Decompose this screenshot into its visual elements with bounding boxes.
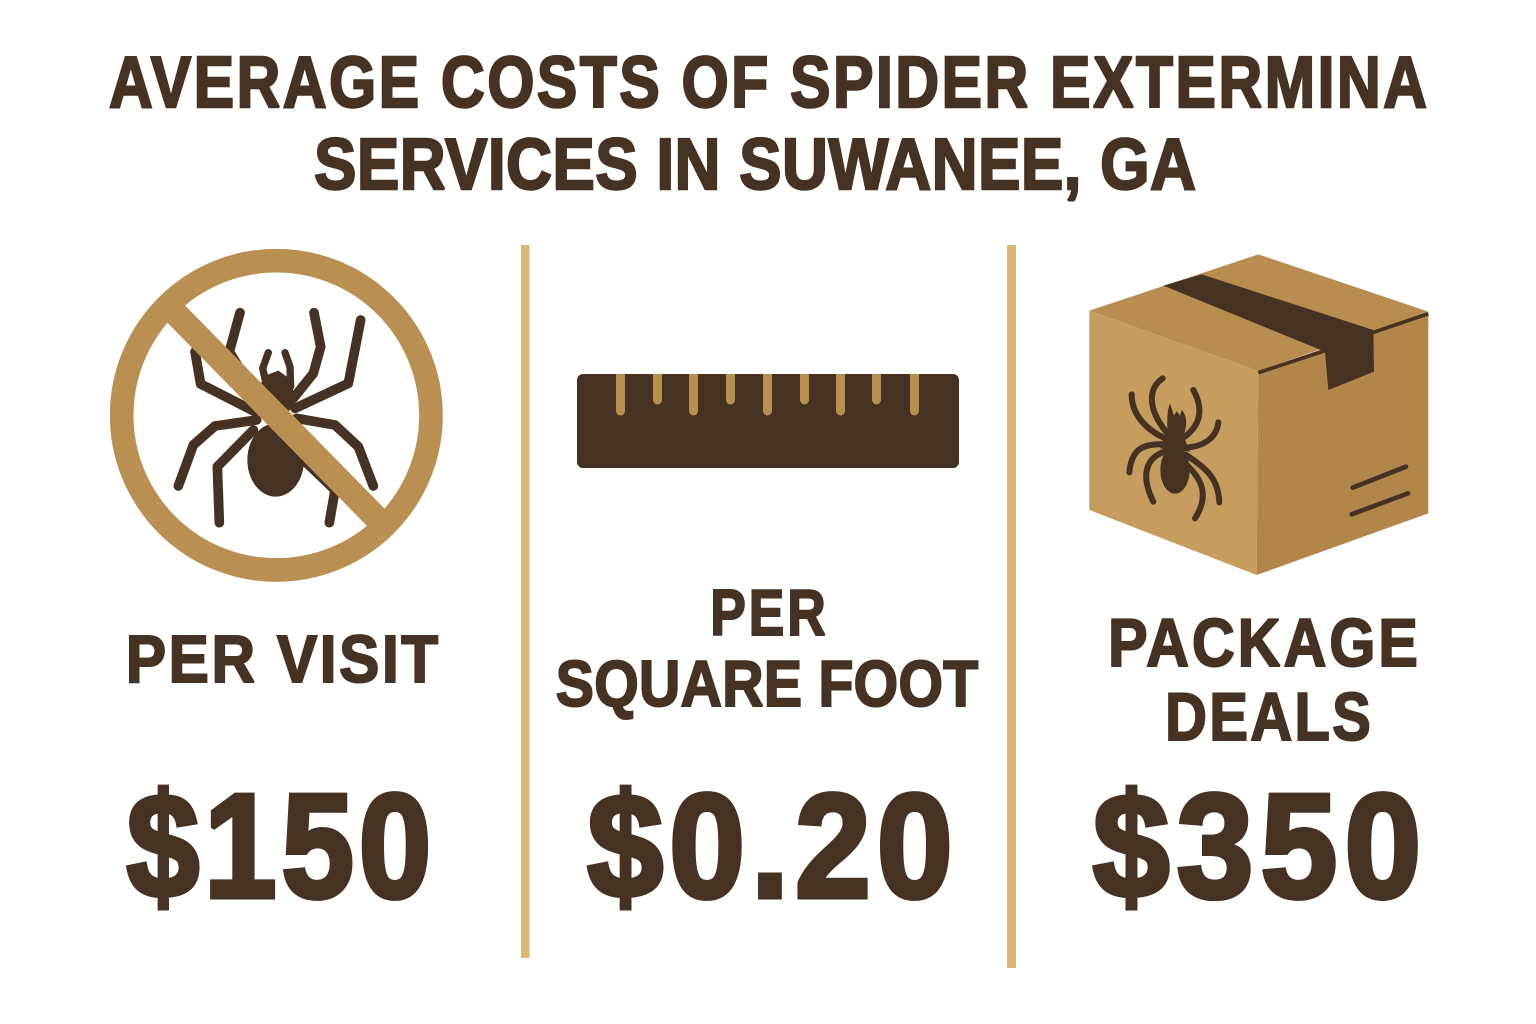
label: package deals: PACKAGE xyxy=(1108,604,1418,681)
price: $0.20: $0.20 xyxy=(587,764,953,929)
icon: no spiders xyxy=(122,261,431,570)
label: package deals xyxy=(1108,604,1418,755)
divider right xyxy=(1007,245,1016,968)
title: SERVICES IN SUWANEE, GA xyxy=(314,125,1196,205)
label: per square foot: SQUARE FOOT xyxy=(556,648,978,720)
icon: spider package box xyxy=(1089,254,1428,575)
label: per visit: PER VISIT xyxy=(126,621,438,697)
label: per square foot: PER xyxy=(710,576,826,649)
label: package deals: DEALS xyxy=(1165,680,1371,755)
label: per square foot xyxy=(556,576,978,720)
icon: ruler xyxy=(577,374,959,468)
divider left xyxy=(521,245,530,958)
price: $350: $350 xyxy=(1093,764,1421,929)
title xyxy=(109,43,1427,205)
title: AVERAGE COSTS OF SPIDER EXTERMINA xyxy=(109,43,1427,123)
price: $150: $150 xyxy=(127,763,431,929)
